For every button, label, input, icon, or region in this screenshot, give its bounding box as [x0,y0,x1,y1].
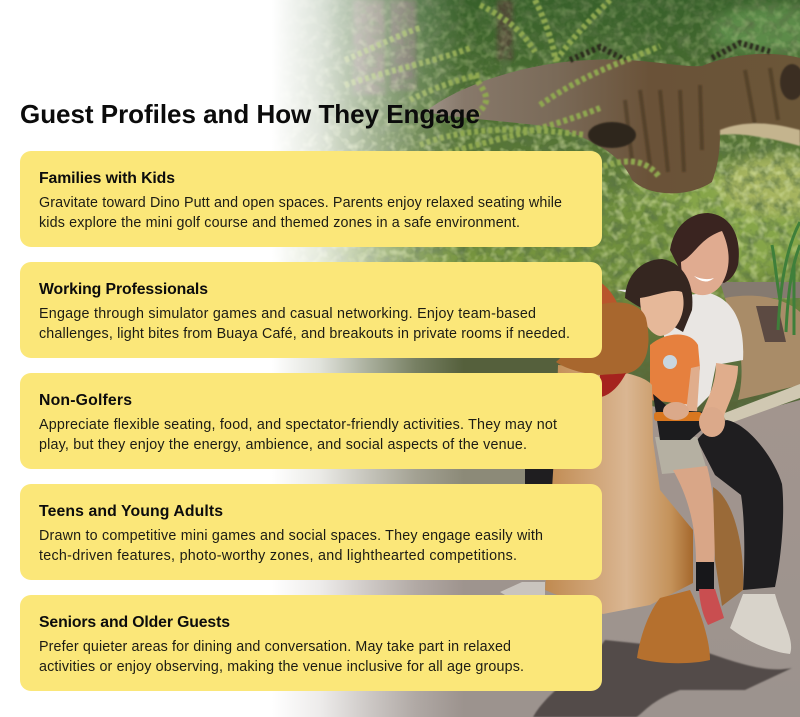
card: Teens and Young Adults: Teens and Young Adults [39,503,223,520]
woman: hair [670,213,739,283]
child: arm [686,366,700,412]
card: Non-Golfers: Appreciate flexible seating, food, and spectator-friendly activities. They may not [39,417,557,433]
dino: handle bag [653,394,707,440]
dino: head [556,302,648,375]
dino: foot [637,590,710,663]
photo: bush highlight texture [309,0,800,300]
woman: trouser behind dino [525,469,555,484]
photo: ferns in front of t-rex [345,0,660,178]
card: Working Professionals: challenges, light bites from Buaya Café, and breakouts in private rooms if needed. [39,326,570,342]
child: hair [625,259,692,332]
photo: plaque on rock [756,306,786,342]
child: face [640,291,684,336]
card: Seniors and Older Guests [20,595,602,691]
photo: road [250,400,800,717]
photo: ride-on dinosaur [545,282,743,663]
dino: red mouth [600,373,626,397]
photo: foliage backdrop [250,0,800,480]
woman: hand [699,407,725,437]
photo: child [625,259,724,625]
dino: body and neck [545,365,693,614]
photo: road shadow [533,640,792,717]
card: Seniors and Older Guests: Seniors and Older Guests [39,614,230,631]
woman: white shirt [617,290,743,420]
photo: path behind people [720,282,800,298]
dino: handlebar [654,412,702,421]
card: Working Professionals: Working Professionals [39,281,208,298]
card: Non-Golfers: Non-Golfers [39,392,132,409]
woman: black trousers [697,420,783,590]
card: Seniors and Older Guests: activities or enjoy observing, making the venue inclusive for all age groups. [39,659,524,675]
photo: bystander shoes [500,582,545,595]
card: Families with Kids: Gravitate toward Dino Putt and open spaces. Parents enjoy relaxed seating while [39,195,562,211]
card: Teens and Young Adults: tech-driven features, photo-worthy zones, and lighthearted competitions. [39,548,517,564]
child: leg [673,466,715,563]
card: Families with Kids: Families with Kids [39,170,175,187]
child: red shoe [699,589,724,625]
card: Working Professionals [20,262,602,358]
woman: white sneaker [730,594,791,654]
photo: rock planter [725,296,800,400]
photo: tree trunks [353,0,513,95]
card: Families with Kids [20,151,602,247]
dino: crest [600,282,622,322]
woman: arm [698,363,738,428]
child: hands on handlebar [663,402,689,420]
card: Families with Kids: kids explore the mini golf course and themed zones in a safe environment. [39,215,520,231]
photo: stone curb [722,384,800,424]
title: Guest Profiles and How They Engage [20,99,480,129]
photo: tall grass plant [772,222,800,335]
photo: foliage texture [250,0,800,480]
child: orange t-shirt [650,334,700,405]
card: Teens and Young Adults [20,484,602,580]
card: Working Professionals: Engage through simulator games and casual networking. Enjoy team-based [39,306,536,322]
photo: ground behind cards [250,469,550,484]
card: Teens and Young Adults: Drawn to competitive mini games and social spaces. They engage easily with [39,528,543,544]
child: shirt badge [663,355,677,369]
dino: rear body [713,487,743,606]
background photo: dinosaur park scene [250,0,800,717]
card: Non-Golfers [20,373,602,469]
photo: woman [525,213,783,590]
photo: strip behind cards: shaded foliage [250,358,560,373]
card: Non-Golfers: play, but they enjoy the energy, ambience, and social aspects of the venue. [39,437,527,453]
photo: t-rex dinosaur [425,43,800,193]
child: shorts [655,437,707,474]
card: Seniors and Older Guests: Prefer quieter areas for dining and conversation. May take part in relaxed [39,639,511,655]
woman: smile [694,276,714,282]
woman: face [681,231,729,295]
photo: bright bushes [580,6,800,282]
child: black sock [696,562,714,591]
